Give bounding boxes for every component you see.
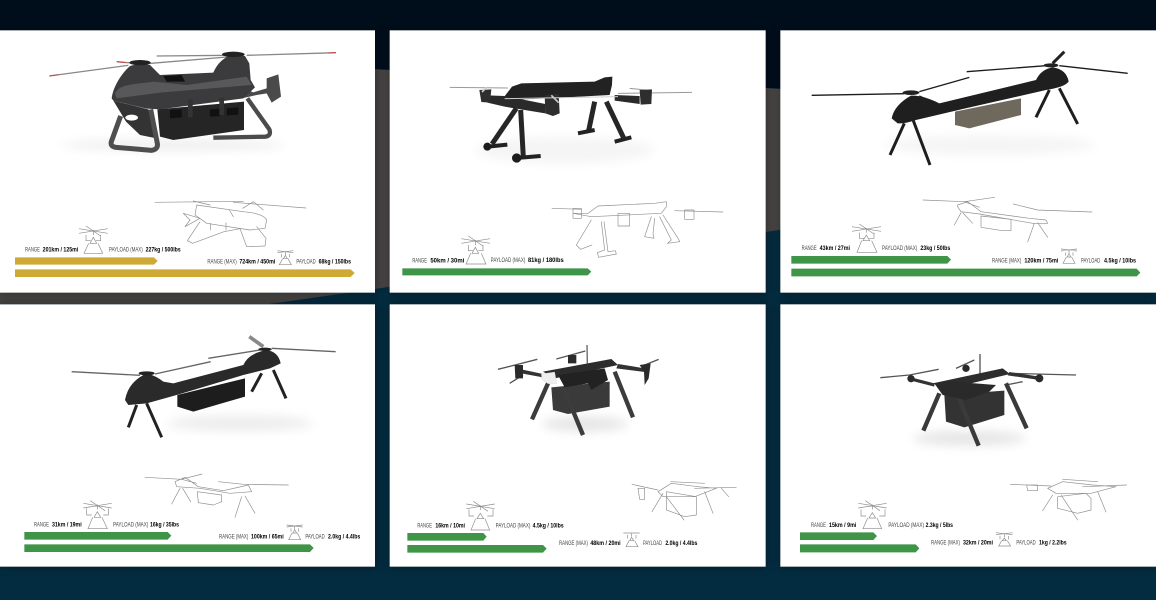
range bar: max range <box>791 269 1140 276</box>
panel: heavy lift tandem drone <box>0 30 375 293</box>
drone render <box>72 337 336 437</box>
spec row: internal payload: RANGE <box>417 523 432 529</box>
spec row: max range: RANGE (MAX) <box>931 541 960 547</box>
spec row: internal payload: 16kg / 35lbs <box>150 522 180 528</box>
drone render <box>49 52 336 150</box>
spec row: internal payload: 201km / 125mi <box>43 248 79 254</box>
spec row: internal payload: 23kg / 50lbs <box>920 246 951 252</box>
spec row: max range: RANGE (MAX) <box>219 534 248 540</box>
icon: internal payload drone <box>466 501 495 530</box>
icon: internal payload drone <box>852 224 881 252</box>
panel: long boom tandem drone with tan payload <box>780 30 1156 293</box>
spec row: internal payload: 4.5kg / 10lbs <box>533 523 564 529</box>
spec row: max range: 2.0kg / 4.4lbs <box>328 534 361 540</box>
spec row: max range: 1kg / 2.2lbs <box>1039 541 1067 547</box>
line drawing of drone <box>632 482 736 520</box>
spec row: internal payload <box>811 523 954 529</box>
icon: payload drone <box>461 236 490 264</box>
panel: long boom tandem drone with dark payload <box>0 304 375 567</box>
panel: quadcopter with white nose <box>390 304 766 567</box>
line drawing of drone <box>552 202 723 257</box>
range bar: internal payload <box>407 533 487 541</box>
spec row: internal payload: 43km / 27mi <box>820 246 850 252</box>
spec row: internal payload <box>802 246 951 252</box>
spec row: internal payload: PAYLOAD (MAX) <box>888 523 924 529</box>
spec row: internal payload: 2.3kg / 5lbs <box>926 523 954 529</box>
spec row: max range: RANGE (MAX) <box>559 541 588 547</box>
icon: small payload drone <box>996 533 1013 546</box>
spec row: max range: RANGE (MAX) <box>207 260 237 266</box>
spec row: max payload: RANGE <box>412 258 427 264</box>
range bar: internal payload <box>791 256 951 264</box>
spec row: max range: PAYLOAD <box>643 541 662 547</box>
icon: internal payload drone <box>83 501 112 529</box>
line drawing of drone <box>155 201 306 247</box>
spec row: internal payload: 227kg / 500lbs <box>146 247 181 253</box>
icon: small payload drone <box>1061 249 1077 263</box>
spec row: internal payload: PAYLOAD (MAX) <box>113 522 148 528</box>
range bar: max range <box>407 545 547 553</box>
drone render <box>450 77 692 163</box>
spec row: max range: 68kg / 150lbs <box>319 260 352 266</box>
range bar: internal payload <box>800 532 877 540</box>
spec row: max payload: PAYLOAD (MAX) <box>491 258 525 264</box>
icon: internal payload drone <box>858 501 887 529</box>
spec row: max range <box>207 260 352 266</box>
spec row: internal payload: 15km / 9mi <box>829 523 857 529</box>
spec row: max range: PAYLOAD <box>1081 259 1101 265</box>
spec row: max range: 100km / 65mi <box>251 534 284 540</box>
spec row: max payload: 81kg / 180lbs <box>528 258 564 264</box>
spec row: max range: RANGE (MAX) <box>992 259 1021 265</box>
line drawing of drone <box>145 474 288 517</box>
spec row: internal payload: PAYLOAD (MAX) <box>882 246 917 252</box>
spec row: max payload <box>412 258 564 264</box>
spec row: internal payload: 31km / 19mi <box>52 523 82 529</box>
spec row: internal payload: 16km / 10mi <box>435 523 465 529</box>
panel: quadcopter with dark nose <box>780 304 1156 567</box>
spec row: internal payload <box>25 247 181 254</box>
spec row: max range: 2.0kg / 4.4lbs <box>665 541 698 547</box>
spec row: internal payload: RANGE <box>25 248 40 254</box>
spec row: max range: 4.5kg / 10lbs <box>1104 259 1137 265</box>
spec row: max range: 48km / 20mi <box>590 541 621 547</box>
spec row: max payload: 50km / 30mi <box>430 258 465 264</box>
spec row: max range: PAYLOAD <box>296 260 316 266</box>
icon: small payload drone <box>623 533 640 547</box>
spec row: max range: 32km / 20mi <box>963 541 993 547</box>
icon: internal payload drone <box>79 226 108 253</box>
spec row: max range: 120km / 75mi <box>1024 259 1059 265</box>
spec row: internal payload: RANGE <box>802 246 817 252</box>
range bar: max range <box>800 544 919 552</box>
range bar: max range <box>15 269 355 277</box>
spec row: internal payload <box>417 523 564 529</box>
spec row: max range: PAYLOAD <box>1016 541 1036 547</box>
spec row: max range <box>931 541 1067 547</box>
drone render <box>812 52 1128 165</box>
spec row: internal payload: PAYLOAD (MAX) <box>496 523 530 529</box>
spec row: max range <box>219 534 361 540</box>
range bar: max range <box>24 544 314 552</box>
panel: quad rotor long body drone <box>390 30 766 293</box>
spec row: max range: 724km / 450mi <box>239 260 276 266</box>
spec row: internal payload <box>34 522 180 529</box>
spec row: internal payload: RANGE <box>811 523 826 529</box>
line drawing of drone <box>1010 479 1127 520</box>
range bar <box>402 268 591 275</box>
spec row: internal payload: RANGE <box>34 523 49 529</box>
spec row: max range: PAYLOAD <box>305 534 325 540</box>
spec row: internal payload: PAYLOAD (MAX) <box>109 247 143 253</box>
icon: small payload drone <box>287 525 303 540</box>
line drawing of drone <box>923 197 1092 242</box>
spec row: max range <box>992 259 1137 265</box>
drone render <box>880 354 1076 446</box>
range bar: internal payload <box>15 257 158 265</box>
icon: small payload drone <box>277 251 293 265</box>
spec row: max range <box>559 541 698 547</box>
drone render <box>498 345 659 435</box>
range bar: internal payload <box>24 532 171 540</box>
